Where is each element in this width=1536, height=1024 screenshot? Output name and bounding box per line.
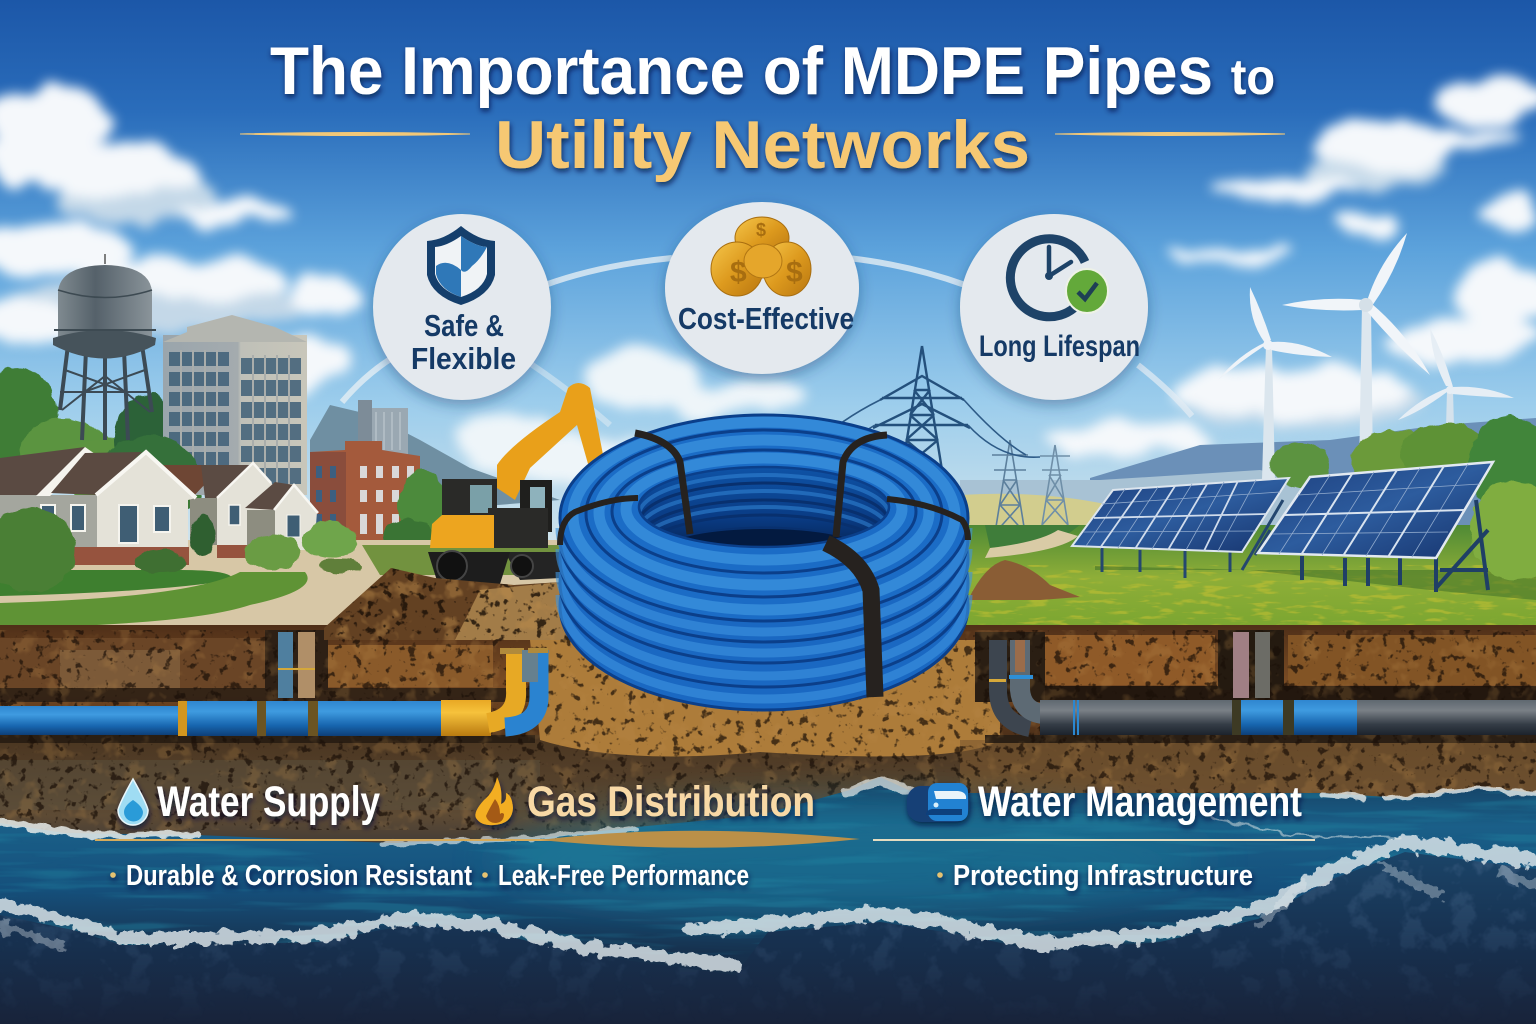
soil panels (0, 630, 1536, 743)
yellow elbow (441, 648, 524, 736)
label: gas distribution: Gas Distribution (527, 778, 815, 826)
elbow gray (989, 640, 1044, 728)
excavator tracks (428, 551, 560, 584)
turbine 1 (1218, 287, 1332, 480)
connecting arcs (342, 258, 1192, 425)
icon: shield (427, 226, 495, 305)
power pylons (800, 346, 1070, 533)
clouds right (1045, 76, 1536, 456)
lower surf foam (0, 843, 1536, 965)
building windows (169, 352, 301, 484)
distant hills (310, 405, 1536, 530)
solar panel right (1258, 462, 1493, 592)
wind turbines (1218, 233, 1514, 480)
brick building (310, 441, 420, 540)
clouds left (0, 86, 365, 388)
clouds centre (450, 352, 805, 482)
underground soil band (0, 625, 1536, 870)
icon: flame (475, 777, 513, 825)
trees behind town (0, 367, 205, 512)
badge: long lifespan (960, 214, 1148, 400)
teal highlight in water (490, 805, 1210, 915)
right buried pipe (989, 632, 1536, 735)
label: water management (907, 778, 1302, 826)
house centre roof (160, 465, 207, 500)
icon: water valve (907, 783, 969, 822)
risers right (1233, 632, 1270, 698)
trees right (1270, 415, 1536, 580)
benefit: leak-free: Leak-Free Performance (498, 860, 749, 892)
office building (163, 315, 307, 495)
benefit: protecting: Protecting Infrastructure (953, 860, 1253, 892)
dark foreground wave (0, 852, 1536, 1024)
title (270, 33, 1275, 183)
sky background (0, 0, 1536, 560)
turbine 3 (1398, 328, 1514, 428)
water tower (53, 254, 156, 440)
distant tower blocks (358, 400, 408, 456)
house small (245, 482, 318, 550)
icon: gold coins: $ (730, 256, 747, 289)
icon: water drop (118, 779, 148, 825)
icon: gold coins (711, 217, 811, 296)
houses (0, 447, 318, 565)
title line two: Utility Networks (495, 107, 1030, 183)
left buried pipe (0, 632, 548, 736)
badge: safe and flexible (373, 214, 551, 400)
house right (190, 463, 272, 558)
blue elbow (505, 648, 548, 727)
dirt pile in front of excavator (324, 568, 569, 640)
pylon small one (992, 440, 1028, 533)
left ground: lawn and path (0, 540, 560, 630)
excavator (428, 383, 606, 584)
upper surf foam (0, 781, 1536, 844)
house main (51, 452, 196, 565)
service risers left (278, 632, 315, 698)
title line one: The Importance of MDPE Pipes to (270, 33, 1275, 109)
icon: clock with check (1010, 239, 1108, 317)
house left wing (0, 447, 100, 560)
excavator cab (430, 479, 552, 548)
badge: cost effective (665, 202, 859, 374)
mottled dark water texture (3, 860, 1536, 974)
shrubs (0, 508, 362, 592)
coil straps (560, 433, 968, 697)
pylon large (873, 346, 970, 470)
tree in front of building (102, 436, 198, 504)
badge: long lifespan: Long Lifespan (979, 330, 1140, 363)
benefit list (110, 860, 1253, 892)
coil stacked rows (560, 415, 968, 710)
badge: safe and flexible: Safe & (424, 308, 504, 343)
title rules (240, 132, 1285, 136)
soil speckle texture (0, 630, 1536, 830)
icon: gold coins: $ (756, 220, 766, 240)
excavator arm (497, 383, 606, 500)
badge: safe and flexible: Flexible (411, 341, 516, 376)
pylon small two (1040, 445, 1070, 525)
coil top rings (573, 422, 955, 610)
bottom divider line (95, 831, 1315, 848)
benefit: durable: Durable & Corrosion Resistant (126, 860, 472, 892)
solar panel left (1072, 478, 1289, 578)
icon: gold coins: $ (786, 256, 803, 289)
water streak texture (0, 790, 1536, 960)
coil of blue MDPE pipe (560, 415, 968, 710)
hole rim (639, 467, 889, 547)
label: water supply: Water Supply (157, 778, 380, 826)
badge: cost effective: Cost-Effective (678, 301, 854, 336)
label: water management: Water Management (978, 778, 1302, 826)
soil mound right (968, 560, 1080, 600)
water background (0, 777, 1536, 1024)
right ground: grass field (965, 525, 1536, 630)
trees beside excavator (383, 470, 446, 551)
coil centre hole (640, 468, 888, 546)
turbine 2 (1282, 233, 1430, 472)
